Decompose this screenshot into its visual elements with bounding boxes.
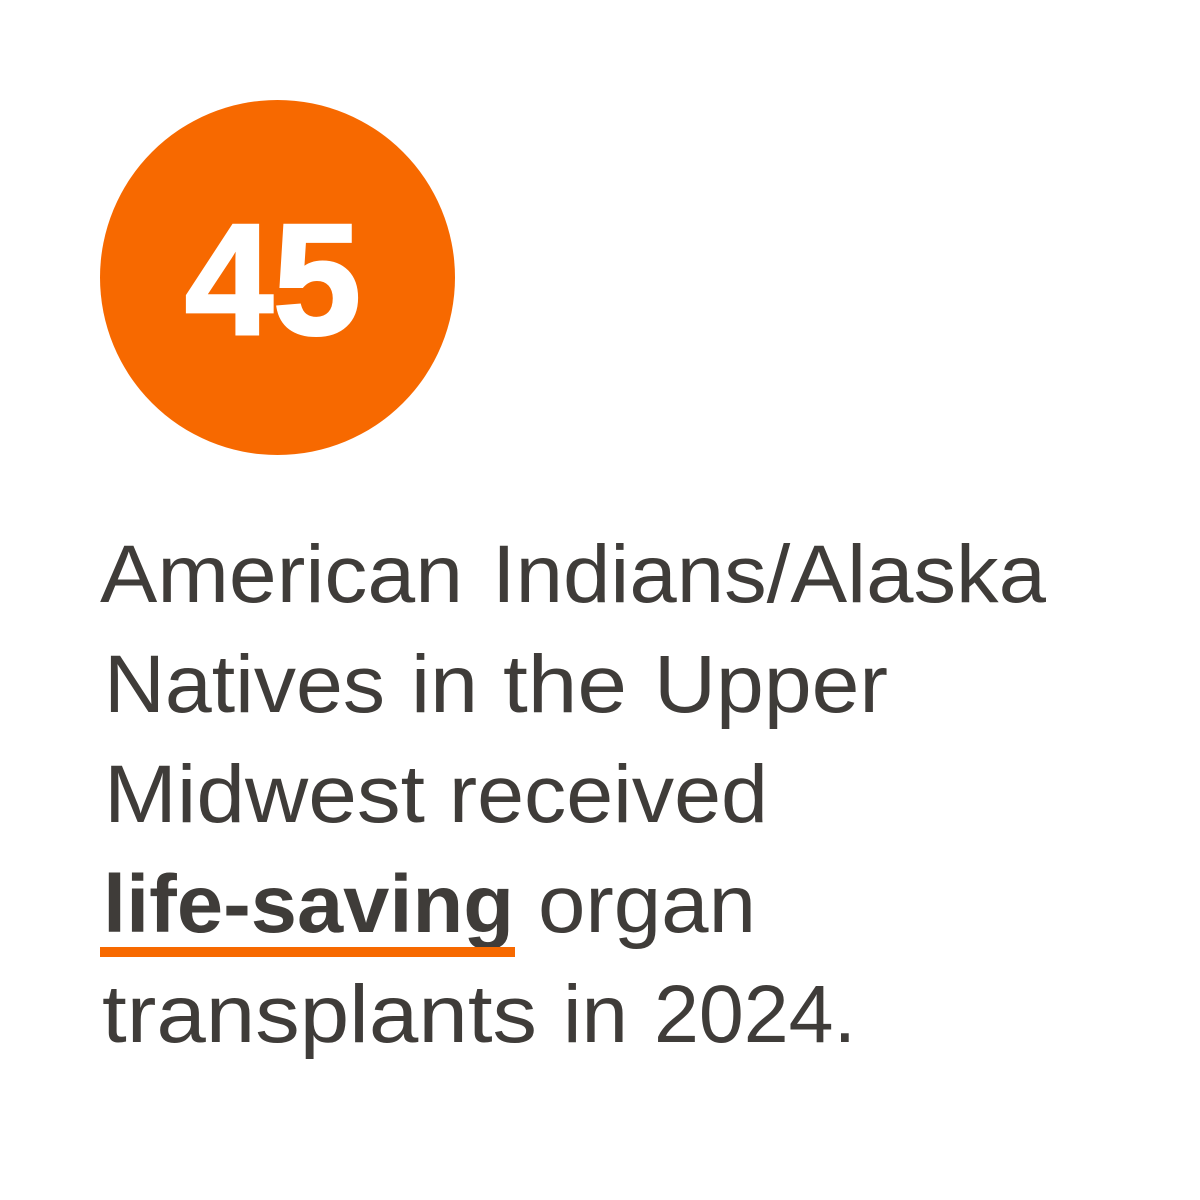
statement text: Natives: [104, 639, 385, 730]
statement text: in: [411, 639, 478, 730]
statement text: [100, 529, 1046, 1060]
statement text: received: [449, 749, 768, 840]
statement text: Upper: [654, 639, 888, 730]
highlight underline: [100, 947, 515, 957]
number badge: 45: 45: [185, 192, 361, 368]
statement text: 2024.: [654, 969, 856, 1060]
statement text: the: [503, 639, 627, 730]
statement text: organ: [538, 859, 756, 950]
statement text: American: [100, 529, 463, 620]
statement text: transplants: [102, 969, 537, 1060]
statement text: in: [563, 969, 628, 1060]
number badge: 45: [100, 100, 455, 455]
statement text: Midwest: [104, 749, 425, 840]
statement text: Indians/Alaska: [492, 529, 1046, 620]
statement text: life-saving: [103, 859, 514, 950]
